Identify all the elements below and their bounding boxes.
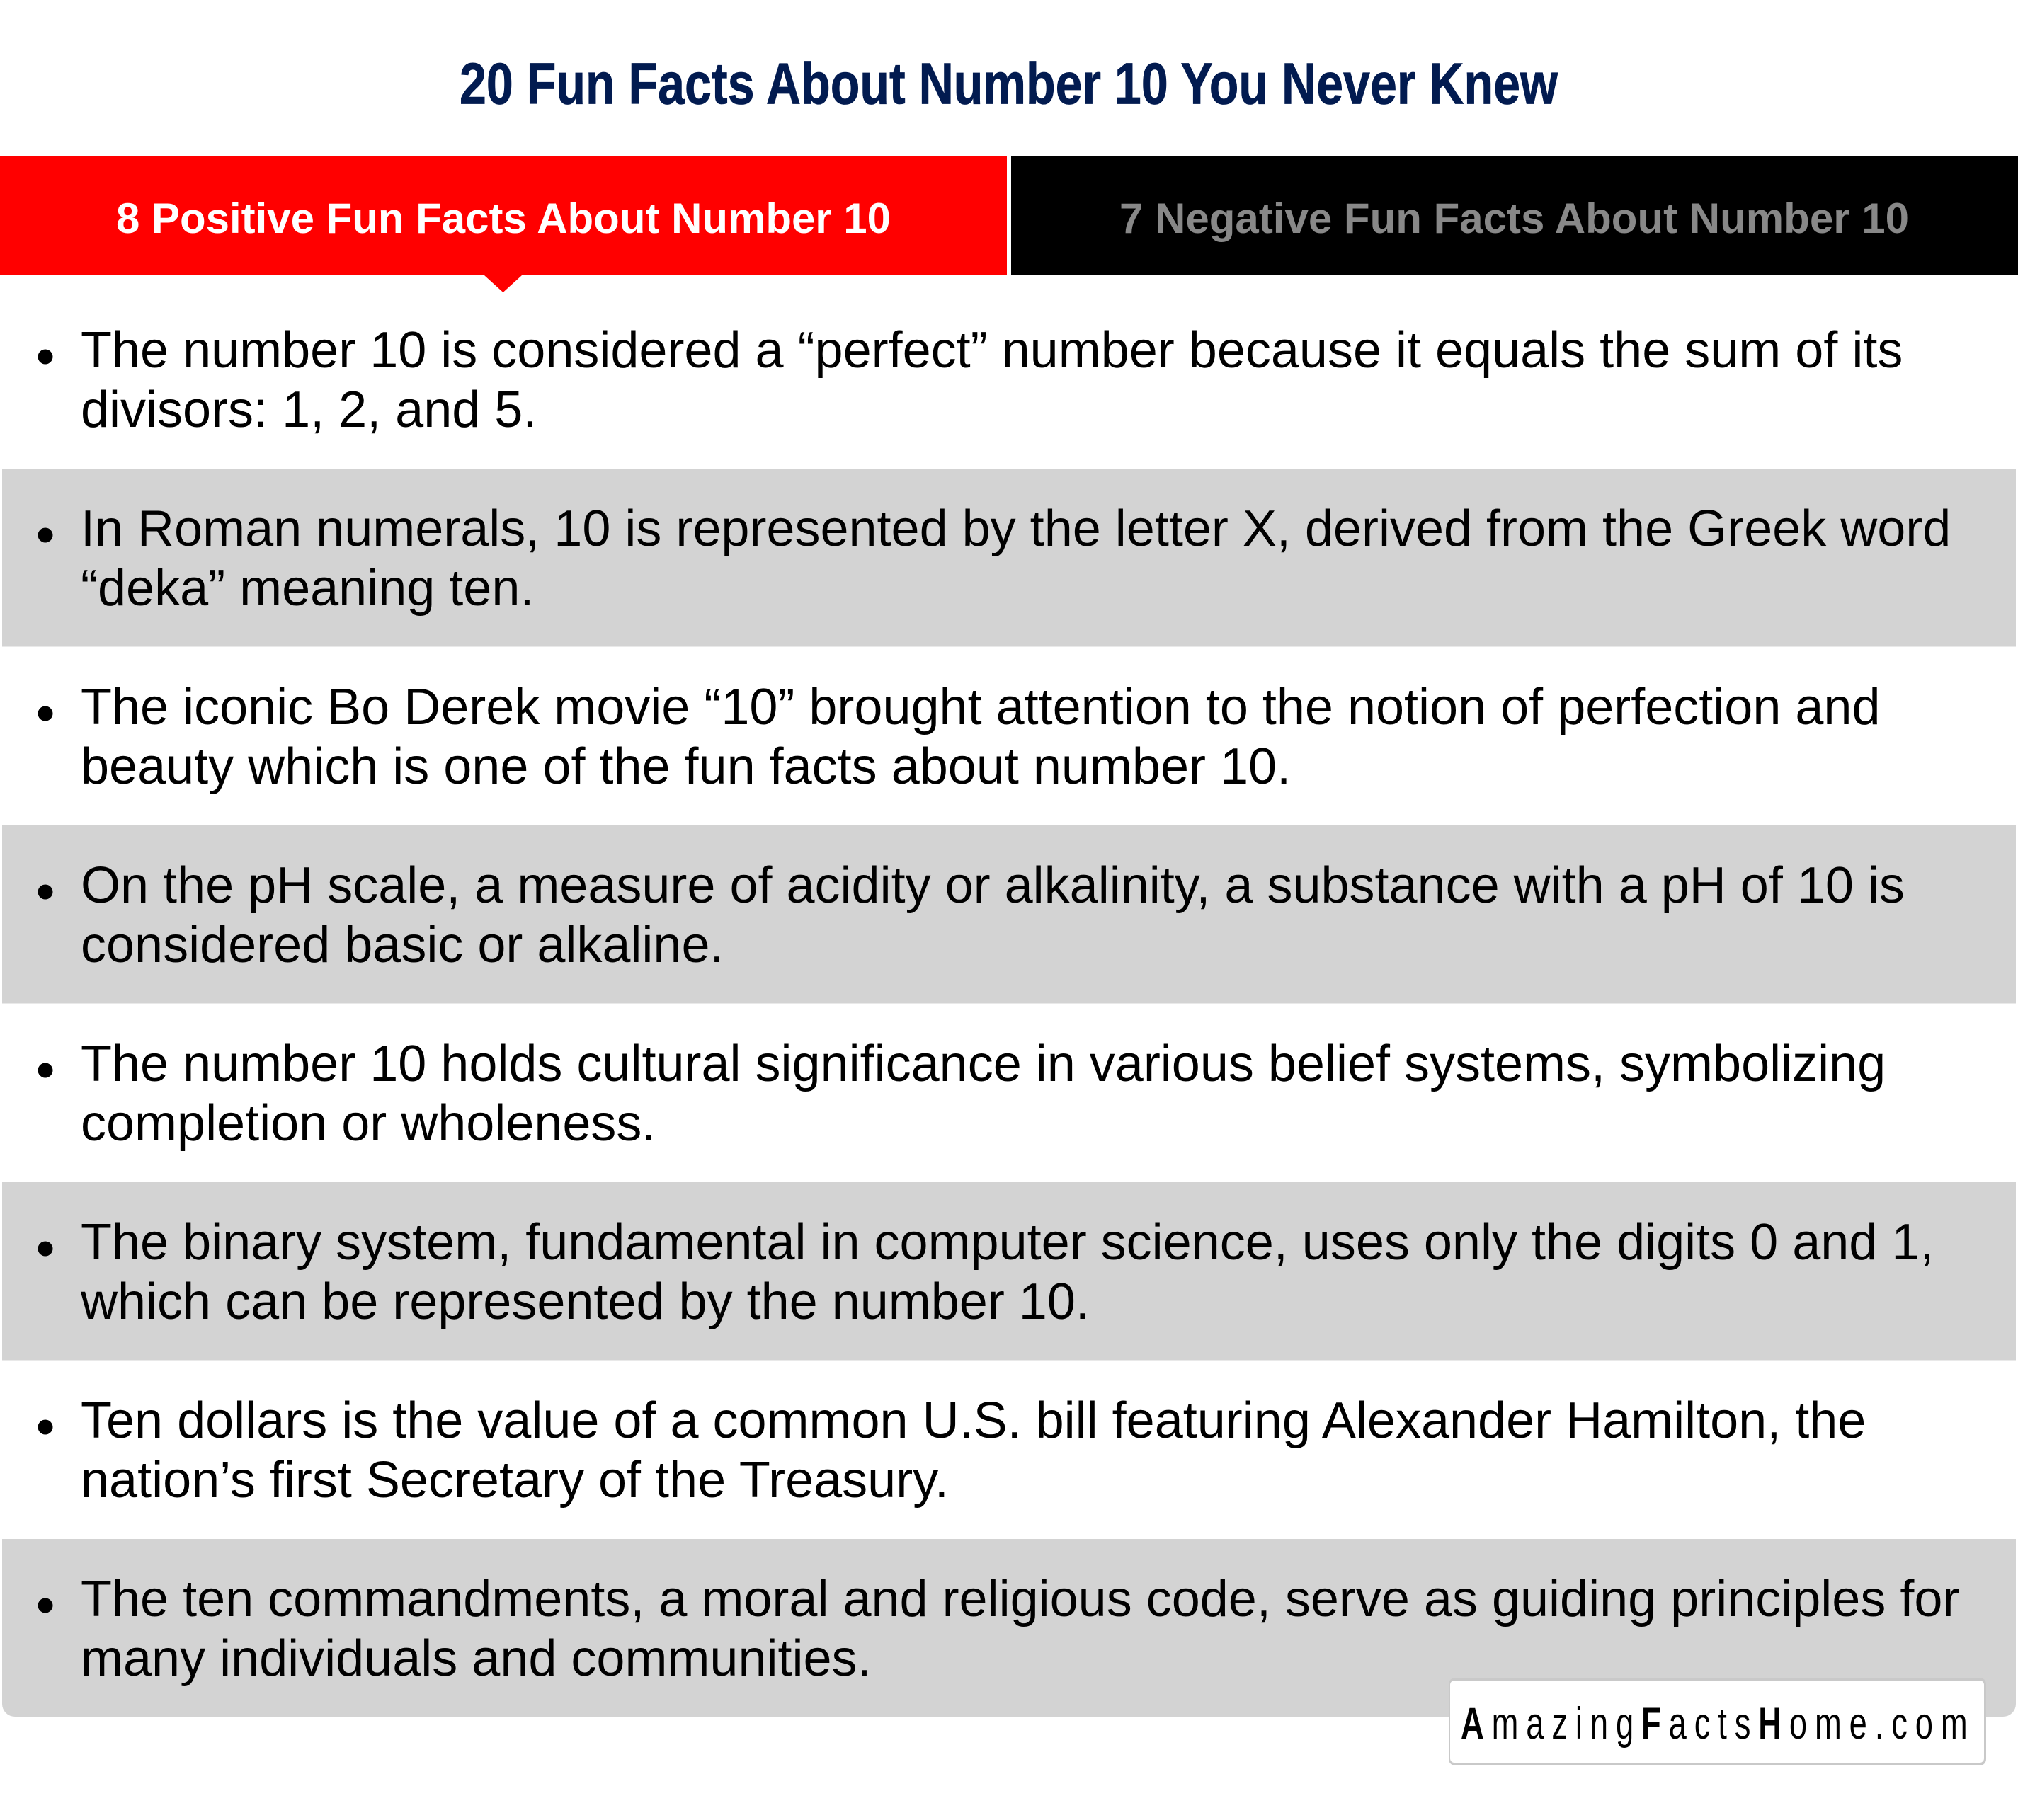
fact 8 xyxy=(2,1539,2016,1717)
fact 4: considered basic or alkaline. xyxy=(81,917,724,973)
tab: positive facts (active) xyxy=(0,156,1007,292)
fact 3: beauty which is one of the fun facts about number 10. xyxy=(81,738,1291,795)
fact 4 xyxy=(2,825,2016,1004)
fact 7 xyxy=(38,1392,1866,1509)
fact 3 xyxy=(38,679,1881,795)
tab: positive facts (active): 8 Positive Fun Facts About Number 10 xyxy=(116,195,891,242)
fact 8: The ten commandments, a moral and religious code, serve as guiding principles for xyxy=(81,1571,1959,1627)
tab: negative facts (inactive): 7 Negative Fun Facts About Number 10 xyxy=(1119,195,1909,242)
fact 2: “deka” meaning ten. xyxy=(81,560,534,617)
fact 8: many individuals and communities. xyxy=(81,1630,872,1687)
fact 1 xyxy=(38,322,1903,438)
tab: negative facts (inactive) xyxy=(1011,156,2018,275)
fact 5: The number 10 holds cultural significance in various belief systems, symbolizing xyxy=(81,1036,1886,1092)
fact 6: The binary system, fundamental in computer science, uses only the digits 0 and 1, xyxy=(81,1214,1934,1271)
fact 4: On the pH scale, a measure of acidity or alkalinity, a substance with a pH of 10 is xyxy=(81,857,1905,914)
fact 2 xyxy=(2,469,2016,647)
fact 2: In Roman numerals, 10 is represented by the letter X, derived from the Greek word xyxy=(81,500,1951,557)
fact 5 xyxy=(38,1036,1886,1152)
fact 7: nation’s first Secretary of the Treasury. xyxy=(81,1452,949,1509)
fact 1: divisors: 1, 2, and 5. xyxy=(81,382,537,438)
fact 1: The number 10 is considered a “perfect” number because it equals the sum of its xyxy=(81,322,1903,379)
fact 6: which can be represented by the number 10. xyxy=(80,1274,1090,1330)
fact 3: The iconic Bo Derek movie “10” brought attention to the notion of perfection and xyxy=(81,679,1881,736)
fact 7: Ten dollars is the value of a common U.S. bill featuring Alexander Hamilton, the xyxy=(81,1392,1866,1449)
watermark badge: AmazingFactsHome.com xyxy=(1461,1698,1975,1749)
fact 5: completion or wholeness. xyxy=(81,1095,656,1152)
fact 6 xyxy=(2,1182,2016,1361)
watermark badge xyxy=(1449,1678,1986,1765)
title: 20 Fun Facts About Number 10 You Never Knew xyxy=(460,51,1558,116)
